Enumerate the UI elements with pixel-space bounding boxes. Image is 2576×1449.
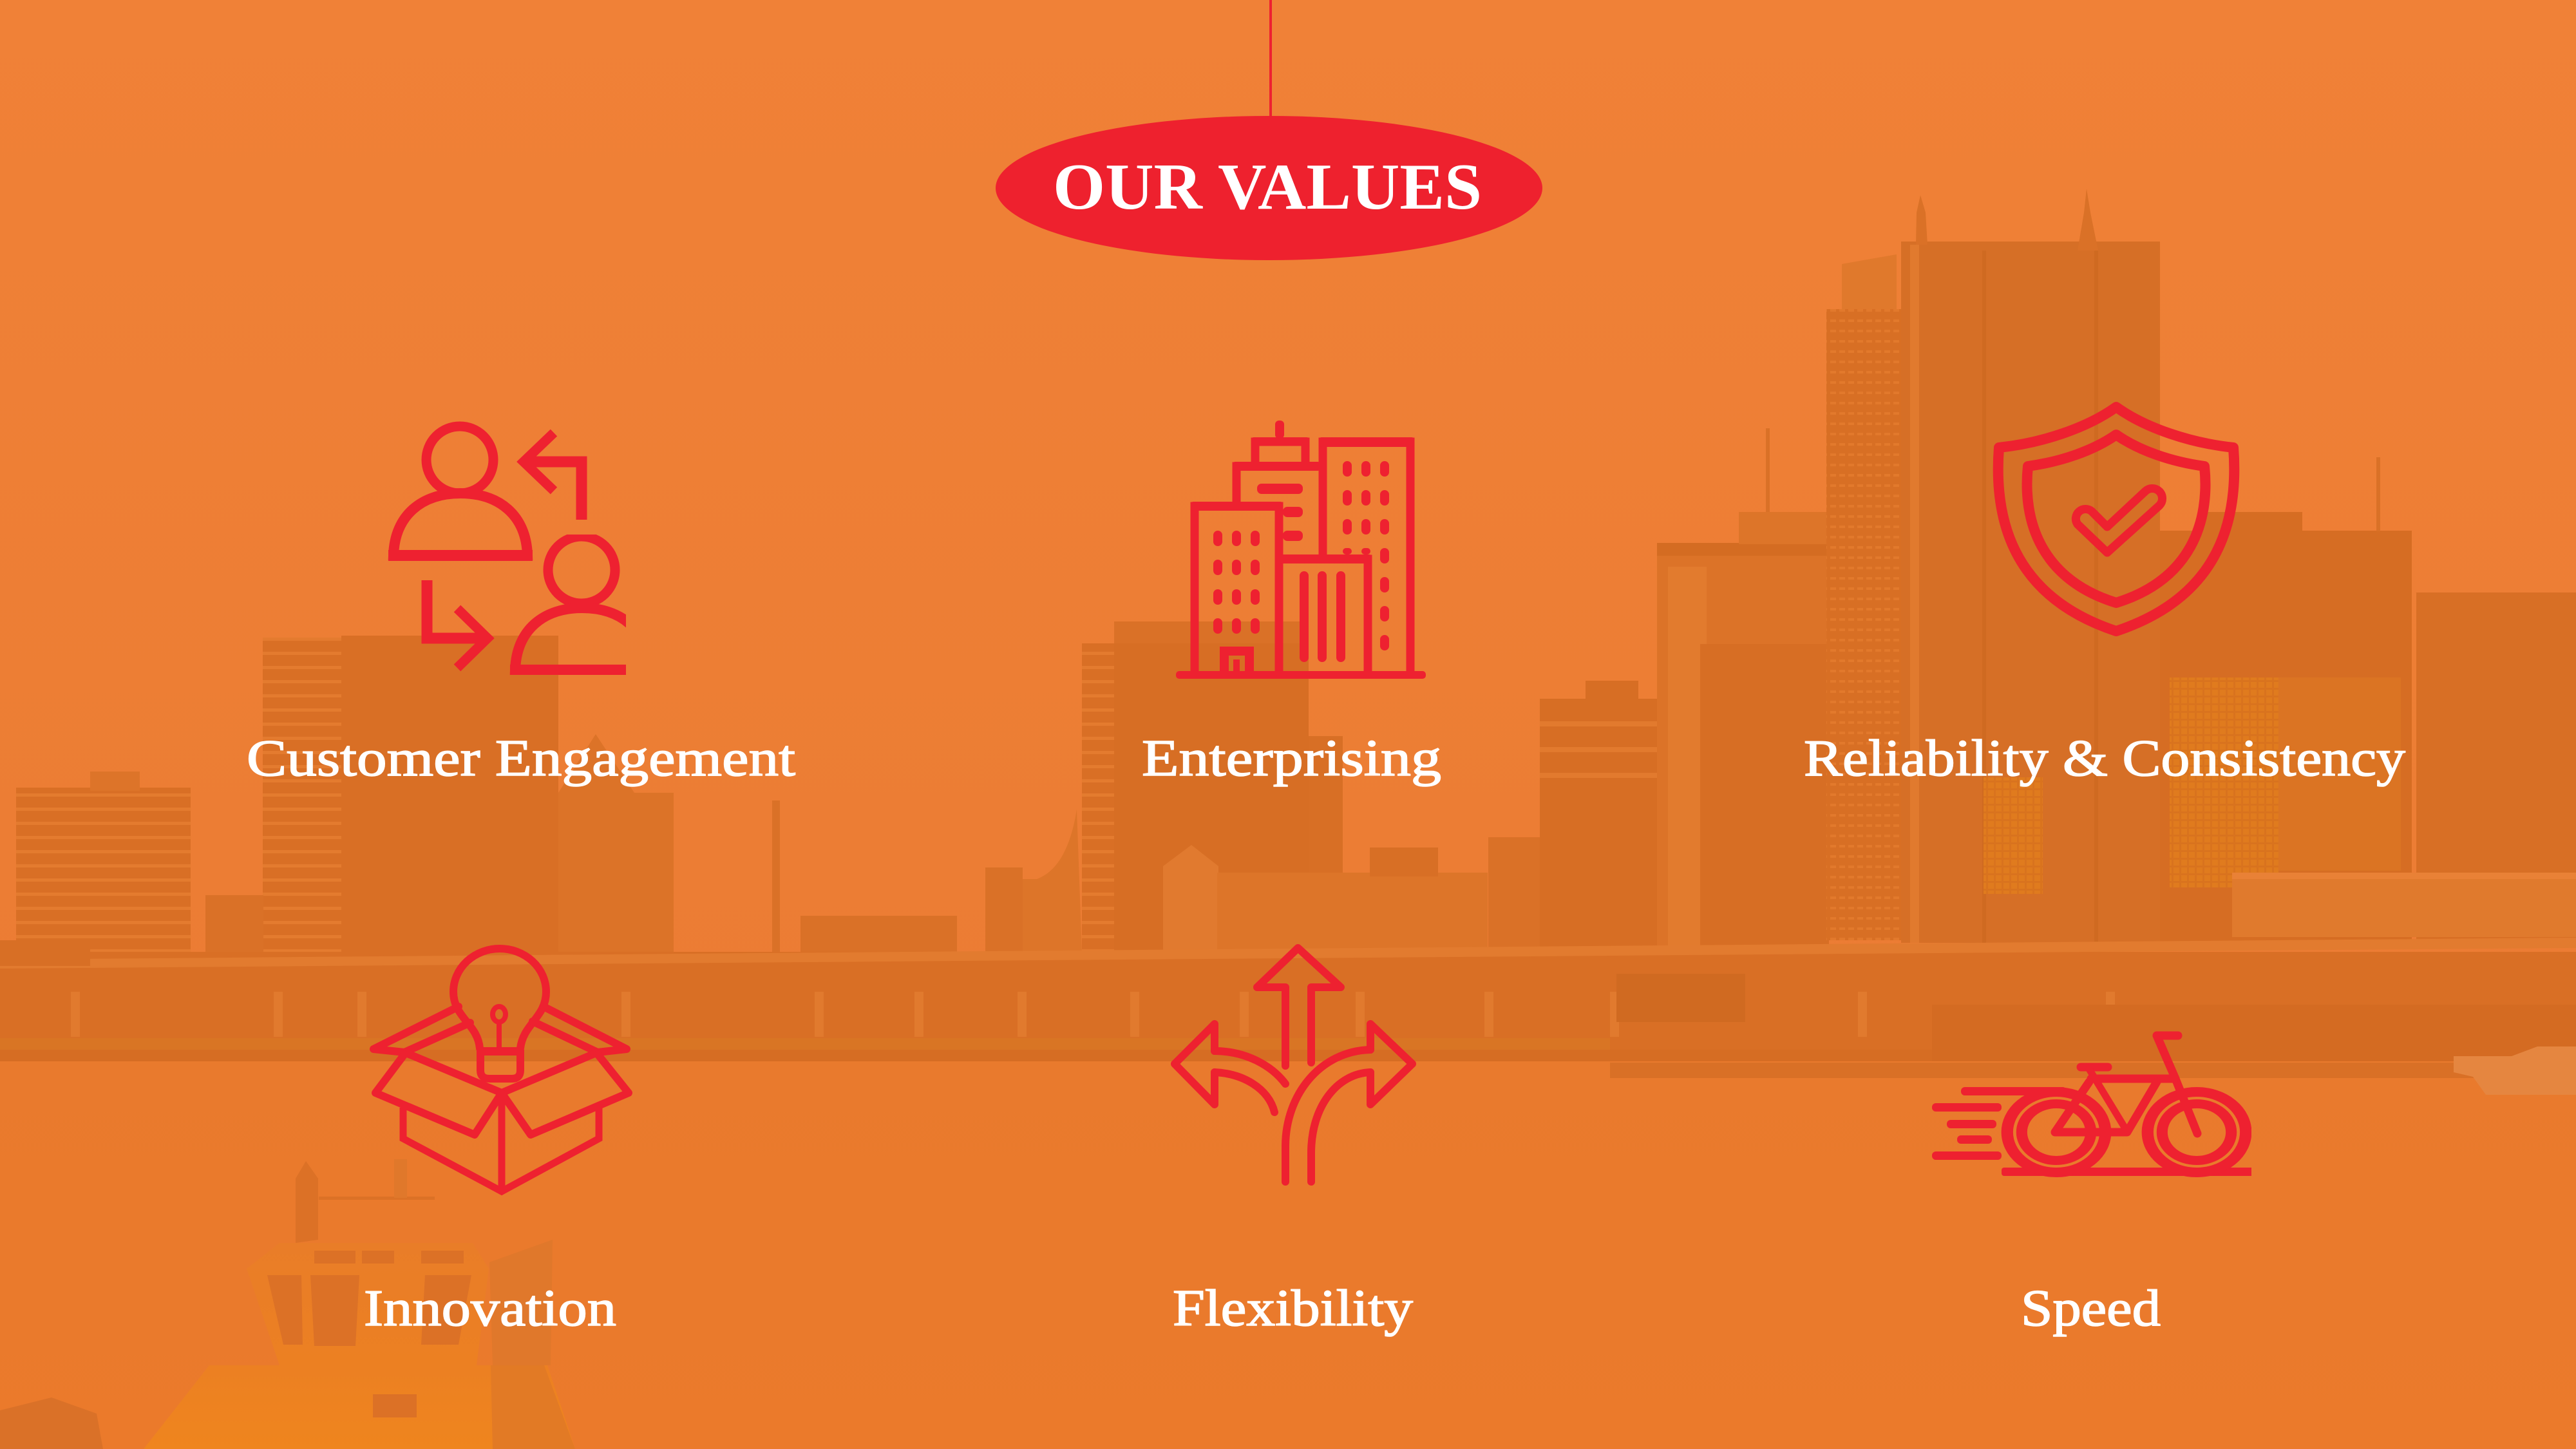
icon: innovation bulb in box [374,949,629,1191]
icon: speed bicycle [1932,1036,2259,1176]
water [0,1061,2576,1449]
label: Reliability & Consistency: Reliability & Consistency [1804,730,2405,787]
icon: customer engagement [388,426,654,674]
tower cluster [1657,189,2576,953]
icon: reliability shield [1998,407,2234,631]
label: Enterprising: Enterprising [1142,730,1441,787]
icon: enterprising buildings [1176,421,1426,679]
title badge: OUR VALUES: OUR VALUES [1053,151,1482,223]
title badge: OUR VALUES [996,116,1542,260]
label: Speed: Speed [2021,1280,2161,1337]
river bridge and shoreline [0,938,2576,1075]
label: Innovation: Innovation [364,1280,616,1337]
ferry [2454,1046,2576,1095]
icon: flexibility arrows [1175,948,1412,1182]
label: Customer Engagement: Customer Engagement [247,730,795,787]
label: Flexibility: Flexibility [1173,1280,1413,1337]
far left building [16,772,191,955]
centre-right building [1540,681,1658,953]
centre-left towers [205,636,1082,954]
tugboat [0,1159,575,1449]
connector line [1269,0,1272,117]
centre tower [1082,621,1540,955]
